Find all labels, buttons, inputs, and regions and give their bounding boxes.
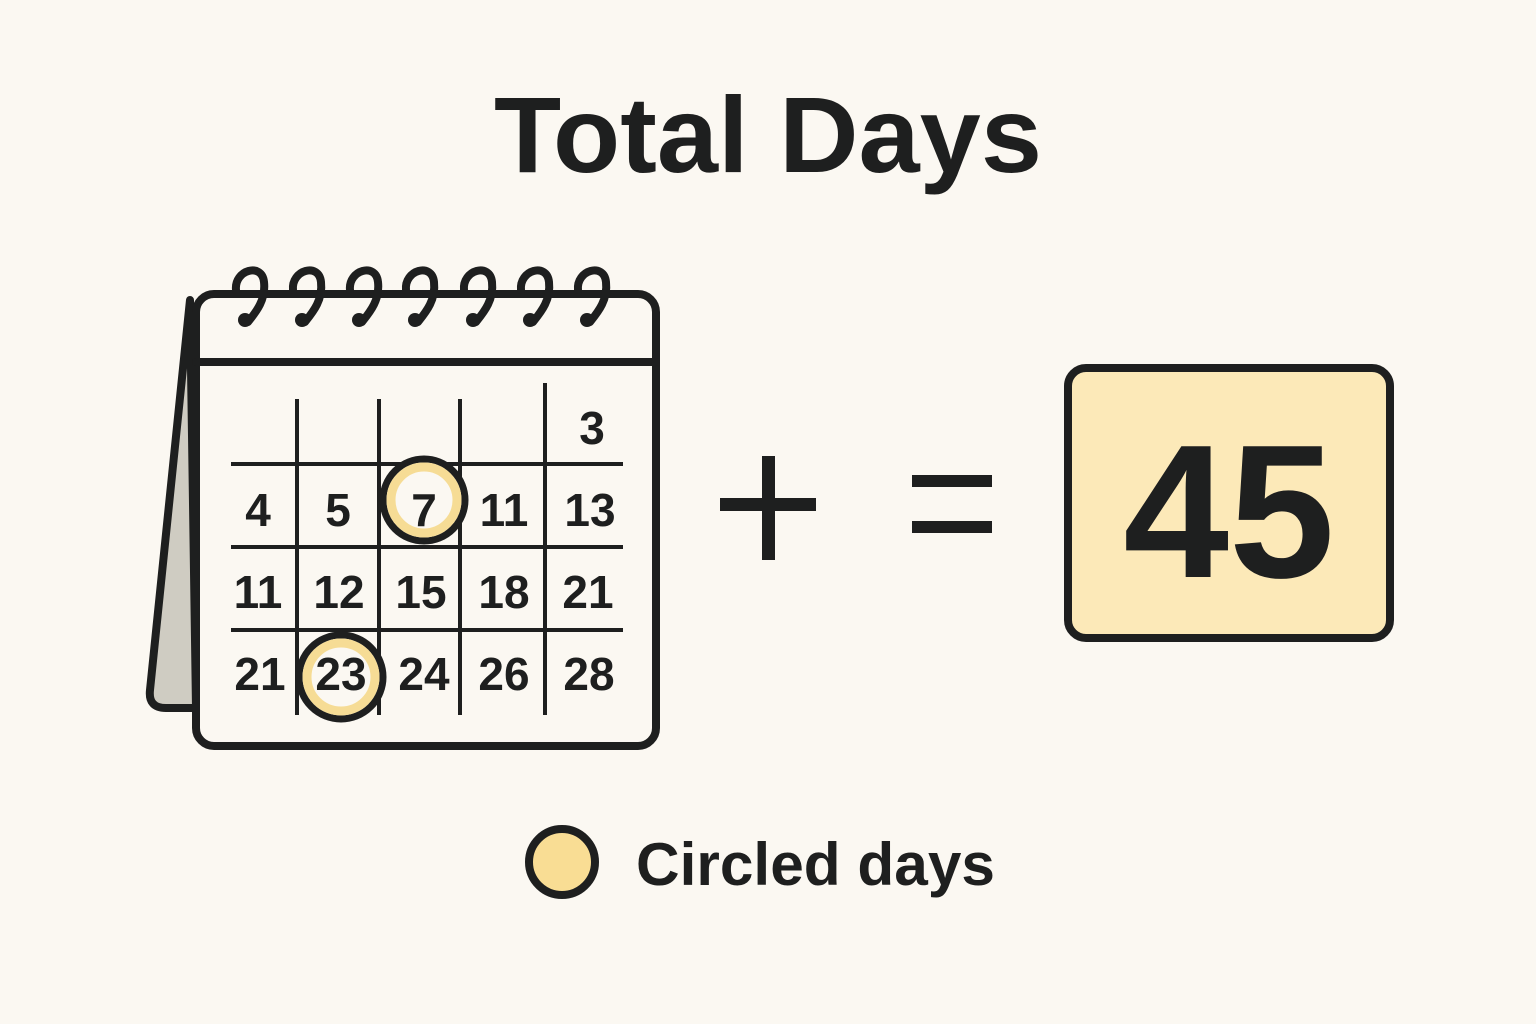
calendar day numbers: 15 [395, 566, 447, 618]
calendar day numbers: 11 [480, 484, 528, 536]
calendar back page [150, 300, 196, 708]
calendar day numbers: 24 [398, 648, 450, 700]
spiral rings [236, 270, 606, 322]
calendar grid [231, 383, 623, 715]
calendar day numbers: 13 [564, 484, 616, 536]
equals sign [912, 475, 992, 533]
result box: 45 [1068, 368, 1390, 638]
calendar day numbers: 11 [234, 566, 282, 618]
result box: 45: 45 [1123, 406, 1335, 618]
circled day 7 [383, 459, 465, 541]
calendar day numbers: 21 [562, 566, 614, 618]
calendar day numbers: 12 [313, 566, 365, 618]
circled day 23 [299, 635, 383, 719]
calendar day numbers: 23 [315, 648, 367, 700]
calendar day numbers: 18 [478, 566, 530, 618]
calendar day numbers: 21 [234, 648, 286, 700]
calendar body [196, 294, 656, 746]
calendar day numbers [234, 402, 616, 700]
calendar day numbers: 3 [579, 402, 605, 454]
title: Total Days [494, 74, 1042, 195]
calendar day numbers: 7 [411, 484, 437, 536]
calendar day numbers: 26 [478, 648, 530, 700]
calendar day numbers: 5 [325, 484, 351, 536]
calendar icon [150, 270, 656, 746]
calendar day numbers: 4 [245, 484, 271, 536]
legend: Circled days [636, 831, 995, 898]
calendar day numbers: 28 [563, 648, 615, 700]
plus sign [720, 456, 816, 560]
